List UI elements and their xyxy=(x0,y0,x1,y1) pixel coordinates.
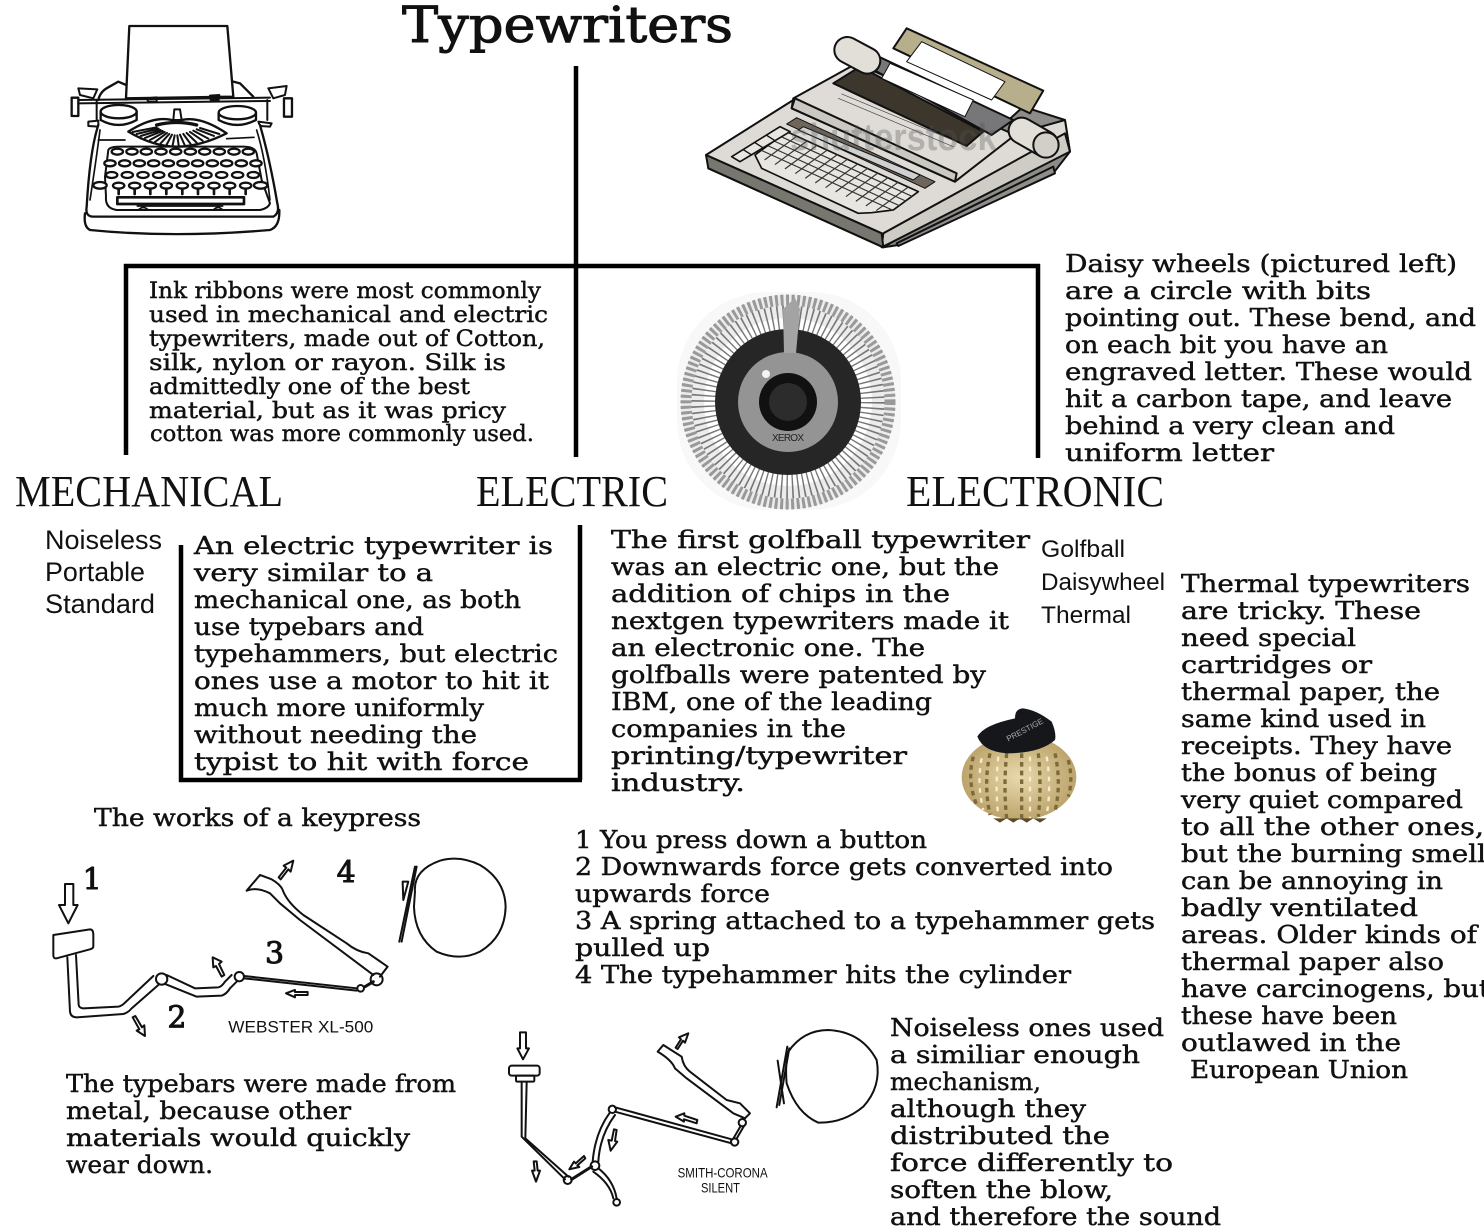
text: ink ribbons: used in mechanical and electric xyxy=(149,303,548,328)
text: ink ribbons: cotton was more commonly used. xyxy=(150,422,534,447)
arrow: key press down xyxy=(517,1032,529,1059)
text: noiseless typewriters: force differently to xyxy=(890,1149,1173,1177)
text: keypress steps: upwards force xyxy=(575,880,770,908)
text: thermal typewriters: are tricky. These xyxy=(1181,597,1421,625)
text: golfball description: addition of chips in the xyxy=(611,580,950,608)
icon: golfball typing element xyxy=(962,708,1076,823)
text: noiseless typewriters: Noiseless ones used xyxy=(890,1014,1164,1042)
text: golfball description: golfballs were patented by xyxy=(611,661,986,689)
list: electronic types xyxy=(1041,536,1165,629)
text: thermal typewriters: thermal paper, the xyxy=(1181,678,1440,706)
text: daisy wheels: are a circle with bits xyxy=(1065,277,1371,305)
icon: golfball typing element: PRESTIGE xyxy=(1005,717,1045,743)
text: electric description: ones use a motor to hit it xyxy=(194,667,549,695)
icon: electronic typewriter illustration xyxy=(706,28,1070,247)
text: daisy wheels: engraved letter. These would xyxy=(1065,358,1472,386)
list: mechanical types: Noiseless xyxy=(45,525,162,555)
list: electronic types: Thermal xyxy=(1041,602,1131,629)
list: mechanical types: Standard xyxy=(45,589,155,619)
text: thermal typewriters: have carcinogens, but xyxy=(1181,975,1484,1003)
heading: electric: ELECTRIC xyxy=(476,467,668,516)
text: thermal typewriters: outlawed in the xyxy=(1181,1029,1401,1057)
text: ink ribbons: typewriters, made out of Cotton, xyxy=(149,327,545,352)
text: electric description: without needing the xyxy=(194,721,477,749)
text: keypress steps: 3 A spring attached to a typehammer gets xyxy=(575,907,1155,935)
diagram: Smith-Corona Silent mechanism xyxy=(509,1030,878,1206)
list: electronic types: Golfball xyxy=(1041,536,1125,563)
text: noiseless typewriters xyxy=(890,1014,1221,1231)
list: mechanical types: Portable xyxy=(45,557,145,587)
diagram: Smith-Corona Silent mechanism: SMITH-CORONA xyxy=(678,1164,768,1180)
text: noiseless typewriters: a similiar enough xyxy=(890,1041,1140,1069)
text: golfball description: was an electric one, but the xyxy=(611,553,999,581)
icon: electronic typewriter illustration: shutterstock xyxy=(790,117,997,159)
text: golfball description: nextgen typewriters made it xyxy=(611,607,1009,635)
diagram: Webster XL-500 keypress mechanism: 3 xyxy=(265,936,284,971)
text: thermal typewriters: but the burning smell xyxy=(1181,840,1484,868)
list: mechanical types xyxy=(45,525,162,619)
text: golfball description: industry. xyxy=(611,769,745,797)
text: golfball description: an electronic one. The xyxy=(611,634,925,662)
text: ink ribbons: silk, nylon or rayon. Silk is xyxy=(149,351,506,376)
text: noiseless typewriters: soften the blow, xyxy=(890,1176,1113,1204)
diagram: Webster XL-500 keypress mechanism: 4 xyxy=(337,856,356,891)
panel: electric typewriter box xyxy=(181,525,582,780)
text: thermal typewriters: to all the other ones, xyxy=(1181,813,1484,841)
text: thermal typewriters: can be annoying in xyxy=(1181,867,1443,895)
text: thermal typewriters: same kind used in xyxy=(1181,705,1426,733)
text: typebars were made from metal: wear down. xyxy=(66,1151,213,1179)
text: thermal typewriters xyxy=(1180,570,1484,1084)
text: thermal typewriters: receipts. They have xyxy=(1181,732,1452,760)
diagram: Smith-Corona Silent mechanism: SILENT xyxy=(701,1180,740,1196)
text: noiseless typewriters: although they xyxy=(890,1095,1087,1123)
text: electric description: mechanical one, as both xyxy=(194,586,521,614)
text: golfball description: printing/typewriter xyxy=(611,742,908,770)
text: typebars were made from metal: materials would quickly xyxy=(66,1124,411,1152)
text: daisy wheels: Daisy wheels (pictured left) xyxy=(1065,250,1457,278)
text: daisy wheels: behind a very clean and xyxy=(1065,412,1395,440)
heading: mechanical: MECHANICAL xyxy=(15,467,283,516)
text: golfball description: The first golfball typewriter xyxy=(611,526,1031,554)
heading: electronic: ELECTRONIC xyxy=(906,467,1164,516)
list: electronic types: Daisywheel xyxy=(1041,569,1165,596)
text: daisy wheels xyxy=(1065,250,1476,467)
text: typebars were made from metal: metal, because other xyxy=(66,1097,352,1125)
text: electric description: use typebars and xyxy=(194,613,424,641)
text: thermal typewriters: thermal paper also xyxy=(1181,948,1444,976)
text: keypress steps: 4 The typehammer hits the cylinder xyxy=(575,961,1072,989)
diagram: Webster XL-500 keypress mechanism: 1 xyxy=(83,862,102,897)
text: keypress steps: pulled up xyxy=(575,934,710,962)
text: electric description: typehammers, but electric xyxy=(194,640,558,668)
icon: daisy wheel photo: XEROX xyxy=(772,433,804,444)
text: thermal typewriters: badly ventilated xyxy=(1181,894,1418,922)
text: noiseless typewriters: mechanism, xyxy=(890,1068,1041,1096)
text: daisy wheels: pointing out. These bend, and xyxy=(1065,304,1476,332)
text: noiseless typewriters: distributed the xyxy=(890,1122,1110,1150)
icon: daisy wheel photo xyxy=(677,292,901,510)
text: daisy wheels: uniform letter xyxy=(1065,439,1275,467)
text: golfball description: companies in the xyxy=(611,715,846,743)
text: thermal typewriters: these have been xyxy=(1181,1002,1397,1030)
connector lines tree xyxy=(124,66,1040,458)
text: electric description: typist to hit with force xyxy=(194,748,529,776)
text: keypress steps: 2 Downwards force gets converted into xyxy=(575,853,1113,881)
text: typebars were made from metal xyxy=(66,1070,456,1179)
text: keypress steps xyxy=(575,826,1155,989)
diagram: Webster XL-500 keypress mechanism xyxy=(53,856,506,1037)
text: thermal typewriters: European Union xyxy=(1190,1056,1408,1084)
text: keypress steps: 1 You press down a button xyxy=(575,826,927,854)
heading: the works of a keypress: The works of a keypress xyxy=(94,804,421,832)
text: ink ribbons: admittedly one of the best xyxy=(149,375,470,400)
diagram: Webster XL-500 keypress mechanism: WEBSTER XL-500 xyxy=(228,1018,373,1037)
text: electric description xyxy=(193,532,558,776)
text: golfball description: IBM, one of the leading xyxy=(611,688,932,716)
diagram: Webster XL-500 keypress mechanism: 2 xyxy=(167,1001,186,1036)
text: thermal typewriters: the bonus of being xyxy=(1181,759,1437,787)
text: thermal typewriters: very quiet compared xyxy=(1180,786,1463,814)
text: thermal typewriters: Thermal typewriters xyxy=(1181,570,1470,598)
text: thermal typewriters: need special xyxy=(1181,624,1356,652)
text: golfball description xyxy=(611,526,1031,797)
text: electric description: very similar to a xyxy=(193,559,433,587)
text: noiseless typewriters: and therefore the sound xyxy=(890,1203,1221,1231)
text: thermal typewriters: cartridges or xyxy=(1181,651,1373,679)
text: thermal typewriters: areas. Older kinds of xyxy=(1181,921,1479,949)
arrow: key press down xyxy=(59,884,78,923)
text: daisy wheels: on each bit you have an xyxy=(1065,331,1388,359)
text: ink ribbons xyxy=(149,279,548,447)
text: typebars were made from metal: The typebars were made from xyxy=(66,1070,456,1098)
text: daisy wheels: hit a carbon tape, and leave xyxy=(1065,385,1452,413)
text: electric description: much more uniformly xyxy=(194,694,484,722)
text: ink ribbons: Ink ribbons were most commonly xyxy=(149,279,542,304)
text: ink ribbons: material, but as it was pricy xyxy=(149,399,507,424)
text: electric description: An electric typewriter is xyxy=(193,532,553,560)
icon: mechanical typewriter line drawing xyxy=(72,26,292,234)
